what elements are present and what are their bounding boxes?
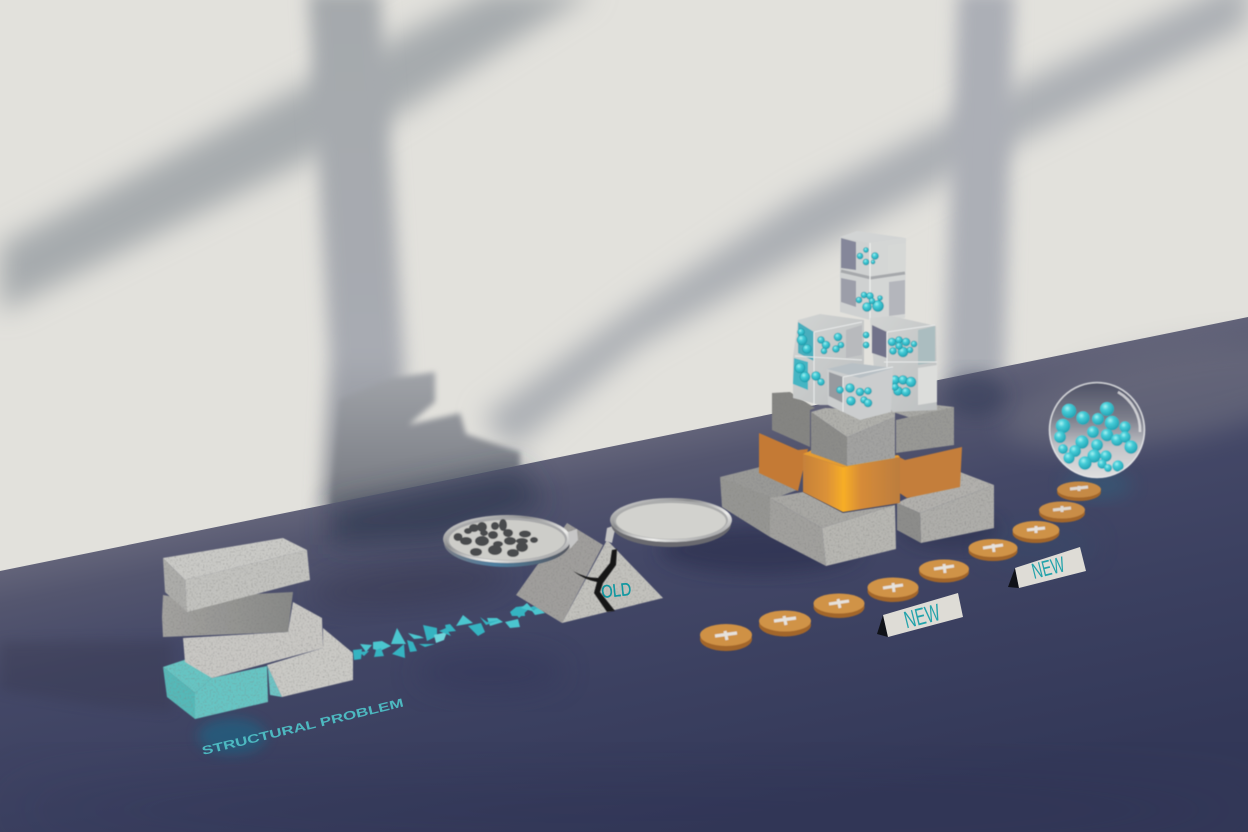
amber tier: [759, 433, 962, 512]
glass sphere of teal balls: [1049, 382, 1145, 478]
coin 1: [700, 624, 752, 651]
bottom right brick: [267, 628, 353, 697]
right scale pan: [605, 498, 732, 547]
coin 8: [1039, 502, 1085, 522]
NEW tag, upper: [1008, 547, 1086, 588]
grey wall reflection on right: [994, 317, 1248, 473]
coin 2: [759, 610, 811, 636]
glass cube: middle left: [793, 314, 869, 405]
floor: [0, 317, 1248, 832]
third brick: [183, 602, 323, 678]
text: OLD: OLD: [600, 579, 632, 602]
teal brick: [163, 658, 268, 719]
cracked OLD pyramid: [516, 523, 663, 623]
dark reflection of the wall shadow: [330, 466, 545, 545]
contact shadows: [415, 650, 565, 694]
crack: [573, 549, 617, 612]
label: structural problem: STRUCTURAL PROBLEM: [200, 696, 405, 758]
glass cube: front: [827, 363, 893, 420]
pyramid faces: [516, 523, 663, 623]
glass cube: middle right: [870, 316, 937, 412]
stacked bricks: [162, 538, 353, 719]
pebbles: [454, 519, 538, 557]
row of plus coins: [700, 482, 1101, 651]
concrete upper tier: [772, 392, 954, 466]
glass cube: top stack: [840, 231, 906, 320]
coin 6: [968, 539, 1018, 561]
tiered block tower: [720, 392, 994, 566]
teal shards: [353, 603, 545, 660]
second brick: [162, 592, 293, 637]
coin 4: [868, 578, 918, 602]
coin 3: [814, 594, 864, 618]
glass cube tower: [793, 231, 937, 420]
coin 7: [1012, 521, 1060, 543]
NEW tag, lower: [877, 593, 963, 637]
concrete base tier: [720, 467, 994, 566]
coin 9: [1057, 482, 1101, 501]
top brick: [163, 538, 310, 612]
NEW tag, lower: NEW: [901, 599, 943, 634]
teal beads in top cubes: [856, 248, 884, 312]
scale pan with pebbles: [443, 515, 578, 567]
NEW tag, upper: NEW: [1029, 552, 1067, 584]
coin 5: [919, 560, 969, 582]
window shadow: vertical bars and diagonal bands: [0, 0, 1248, 510]
wall: [0, 0, 1248, 580]
